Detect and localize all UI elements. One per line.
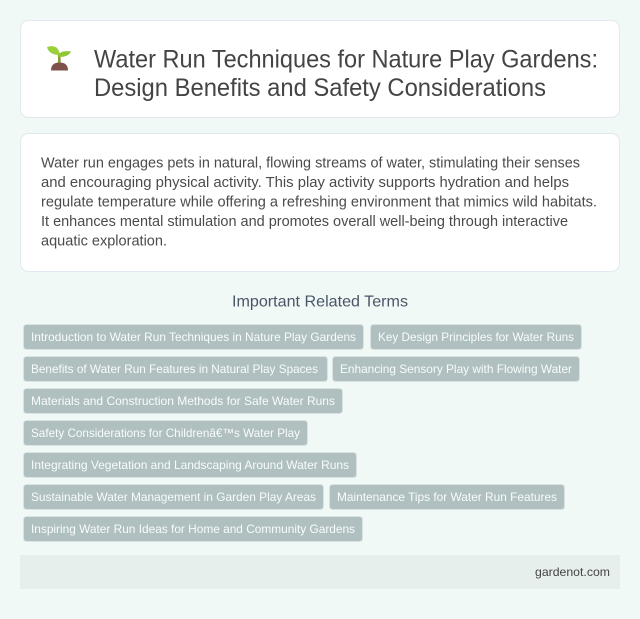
tag xyxy=(24,356,328,382)
tag: Safety Considerations for Childrenâ€™s Water Play xyxy=(31,426,300,440)
tag: Integrating Vegetation and Landscaping Around Water Runs xyxy=(31,458,349,472)
tag: Materials and Construction Methods for Safe Water Runs xyxy=(31,394,335,408)
title: Design Benefits and Safety Considerations xyxy=(94,74,546,102)
text block: description: and encouraging physical activity. This play activity supports hydration and helps xyxy=(41,175,569,191)
panel: header card xyxy=(20,20,620,118)
footer: gardenot.com xyxy=(535,565,610,579)
tag: Introduction to Water Run Techniques in Nature Play Gardens xyxy=(31,330,356,344)
footer xyxy=(20,555,620,589)
tag xyxy=(370,324,582,350)
tag: Benefits of Water Run Features in Natural Play Spaces xyxy=(31,362,318,376)
text block: description: Water run engages pets in natural, flowing streams of water, stimulating their senses xyxy=(41,156,580,172)
text block: description xyxy=(41,156,597,250)
tag xyxy=(24,452,356,478)
panel: description xyxy=(20,134,620,272)
tag: Key Design Principles for Water Runs xyxy=(378,330,574,344)
title xyxy=(94,46,598,102)
tag xyxy=(24,484,324,510)
tag: Sustainable Water Management in Garden Play Areas xyxy=(31,490,316,504)
tag: Maintenance Tips for Water Run Features xyxy=(337,490,557,504)
heading: related terms: Important Related Terms xyxy=(232,294,408,310)
icon: sprout xyxy=(47,46,71,70)
tag xyxy=(24,420,308,446)
text block: description: aquatic exploration. xyxy=(41,234,167,250)
tag xyxy=(24,324,364,350)
title: Water Run Techniques for Nature Play Gardens: xyxy=(94,46,598,74)
tag xyxy=(24,516,362,542)
tag list xyxy=(24,324,582,542)
text block: description: It enhances mental stimulation and promotes overall well-being through interactive xyxy=(41,214,568,230)
tag: Inspiring Water Run Ideas for Home and Community Gardens xyxy=(31,522,355,536)
tag xyxy=(330,484,564,510)
tag: Enhancing Sensory Play with Flowing Water xyxy=(340,362,572,376)
tag xyxy=(332,356,580,382)
tag xyxy=(24,388,342,414)
text block: description: regulate temperature while offering a refreshing environment that mimics wild habitats. xyxy=(41,194,597,210)
